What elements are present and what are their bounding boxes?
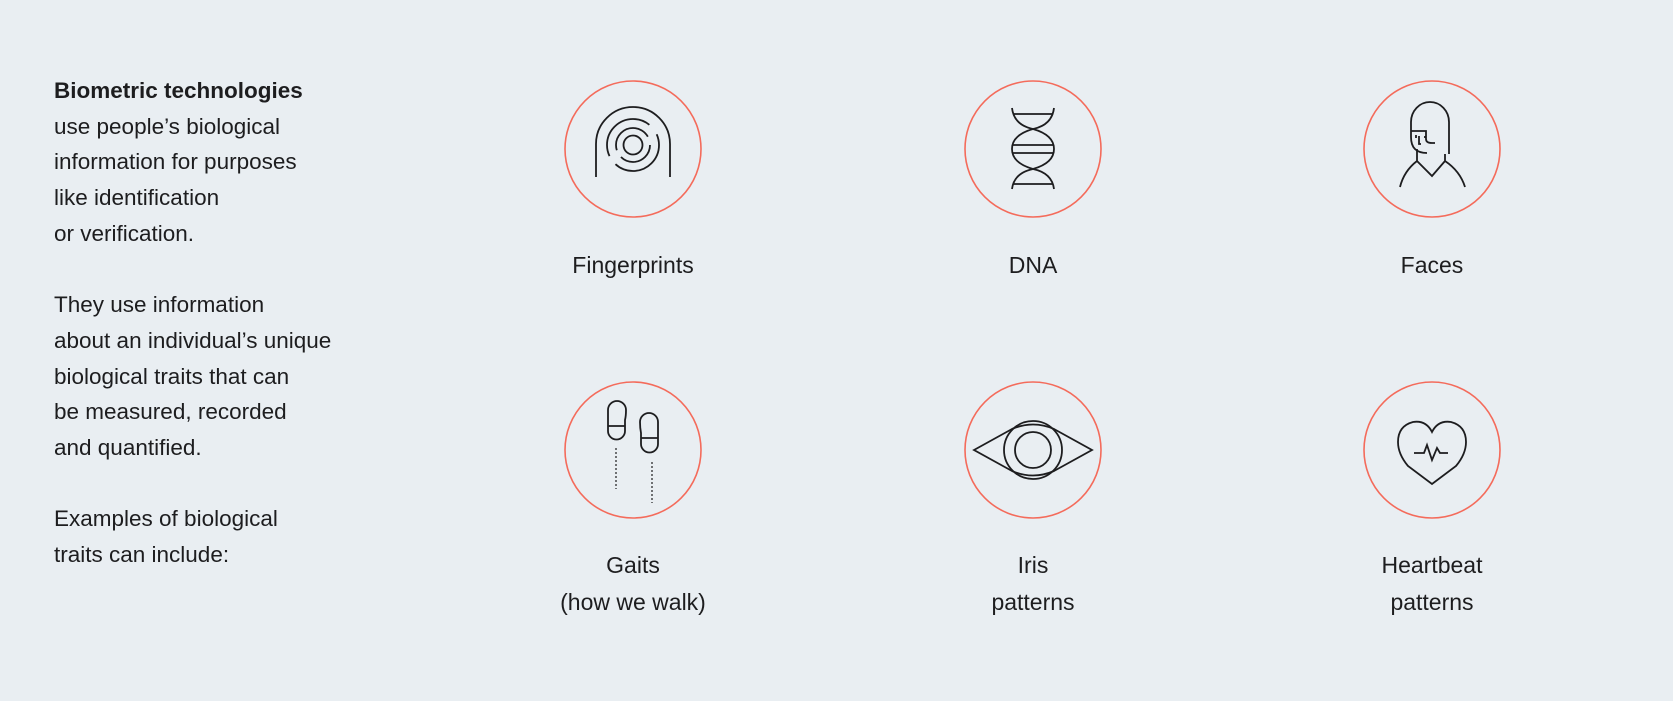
intro text: like identification xyxy=(54,185,219,210)
intro text: about an individual’s unique xyxy=(54,328,331,353)
label: Iris patterns xyxy=(991,552,1075,615)
icon: eye xyxy=(965,382,1101,518)
intro text: They use information xyxy=(54,292,264,317)
intro text: use people’s biological xyxy=(54,114,280,139)
intro text: be measured, recorded xyxy=(54,399,287,424)
intro text xyxy=(54,78,331,567)
intro text: biological traits that can xyxy=(54,364,289,389)
label: Gaits: Gaits xyxy=(606,552,660,578)
intro text: or verification. xyxy=(54,221,194,246)
icon: fingerprint xyxy=(565,81,701,217)
label: Heartbeat patterns: Heartbeat xyxy=(1381,552,1482,578)
intro text: and quantified. xyxy=(54,435,202,460)
label: Heartbeat patterns: patterns xyxy=(1390,589,1474,615)
label: Fingerprints: Fingerprints xyxy=(572,252,694,278)
label: Iris patterns: patterns xyxy=(991,589,1075,615)
icon: face xyxy=(1364,81,1500,217)
icon: DNA xyxy=(965,81,1101,217)
label: Faces: Faces xyxy=(1401,252,1463,278)
label: Iris patterns: Iris xyxy=(1018,552,1048,578)
intro text: traits can include: xyxy=(54,542,229,567)
intro text: information for purposes xyxy=(54,149,297,174)
label: Gaits: (how we walk) xyxy=(560,589,706,615)
label: Gaits xyxy=(560,552,706,615)
icon: footprints xyxy=(565,382,701,518)
intro text: Biometric technologies xyxy=(54,78,303,103)
label: DNA: DNA xyxy=(1009,252,1057,278)
label: Heartbeat patterns xyxy=(1381,552,1482,615)
intro text: Examples of biological xyxy=(54,506,278,531)
icon: heart xyxy=(1364,382,1500,518)
